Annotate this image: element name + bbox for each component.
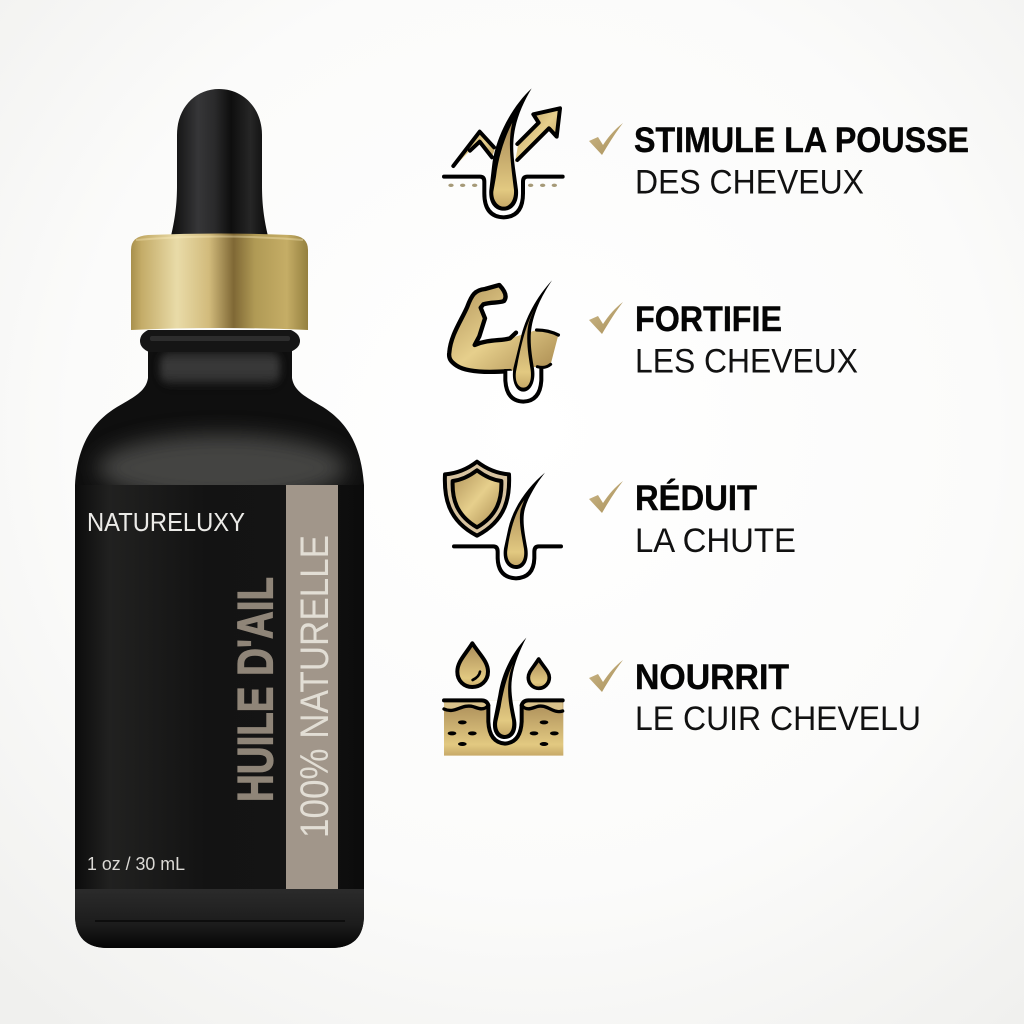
benefit 3 xyxy=(589,478,796,560)
dropper bulb xyxy=(171,89,268,236)
benefit 4 xyxy=(589,658,921,738)
benefit 4: LE CUIR CHEVELU xyxy=(635,700,921,738)
bottle body xyxy=(75,350,364,948)
check mark xyxy=(589,481,623,513)
benefit text: RÉDUIT xyxy=(635,478,757,518)
product: dropper bottle xyxy=(75,89,364,948)
icon: nourishing oil xyxy=(444,638,563,756)
check mark xyxy=(589,302,623,334)
benefit text: STIMULE LA POUSSE xyxy=(634,121,969,160)
icon: hair growth xyxy=(444,88,563,217)
neck ring xyxy=(140,330,300,352)
benefit 2 xyxy=(589,300,858,380)
benefit 3: LA CHUTE xyxy=(635,522,796,560)
icon: shield protection xyxy=(445,462,561,578)
benefit 1 xyxy=(589,121,969,202)
benefit text: FORTIFIE xyxy=(635,300,782,339)
check mark xyxy=(589,660,623,692)
volume: 1 oz / 30 mL xyxy=(87,854,185,874)
benefit 2: LES CHEVEUX xyxy=(635,342,858,380)
natural claim: 100% NATURELLE xyxy=(293,535,337,838)
icon: strong arm xyxy=(449,280,558,402)
label stripe xyxy=(286,485,338,889)
gold cap xyxy=(131,234,308,330)
product name: HUILE D'AIL xyxy=(228,577,284,802)
brand name: NATURELUXY xyxy=(87,507,245,537)
benefit text: NOURRIT xyxy=(635,658,789,697)
benefit 1: DES CHEVEUX xyxy=(635,164,864,202)
check mark xyxy=(589,123,623,155)
